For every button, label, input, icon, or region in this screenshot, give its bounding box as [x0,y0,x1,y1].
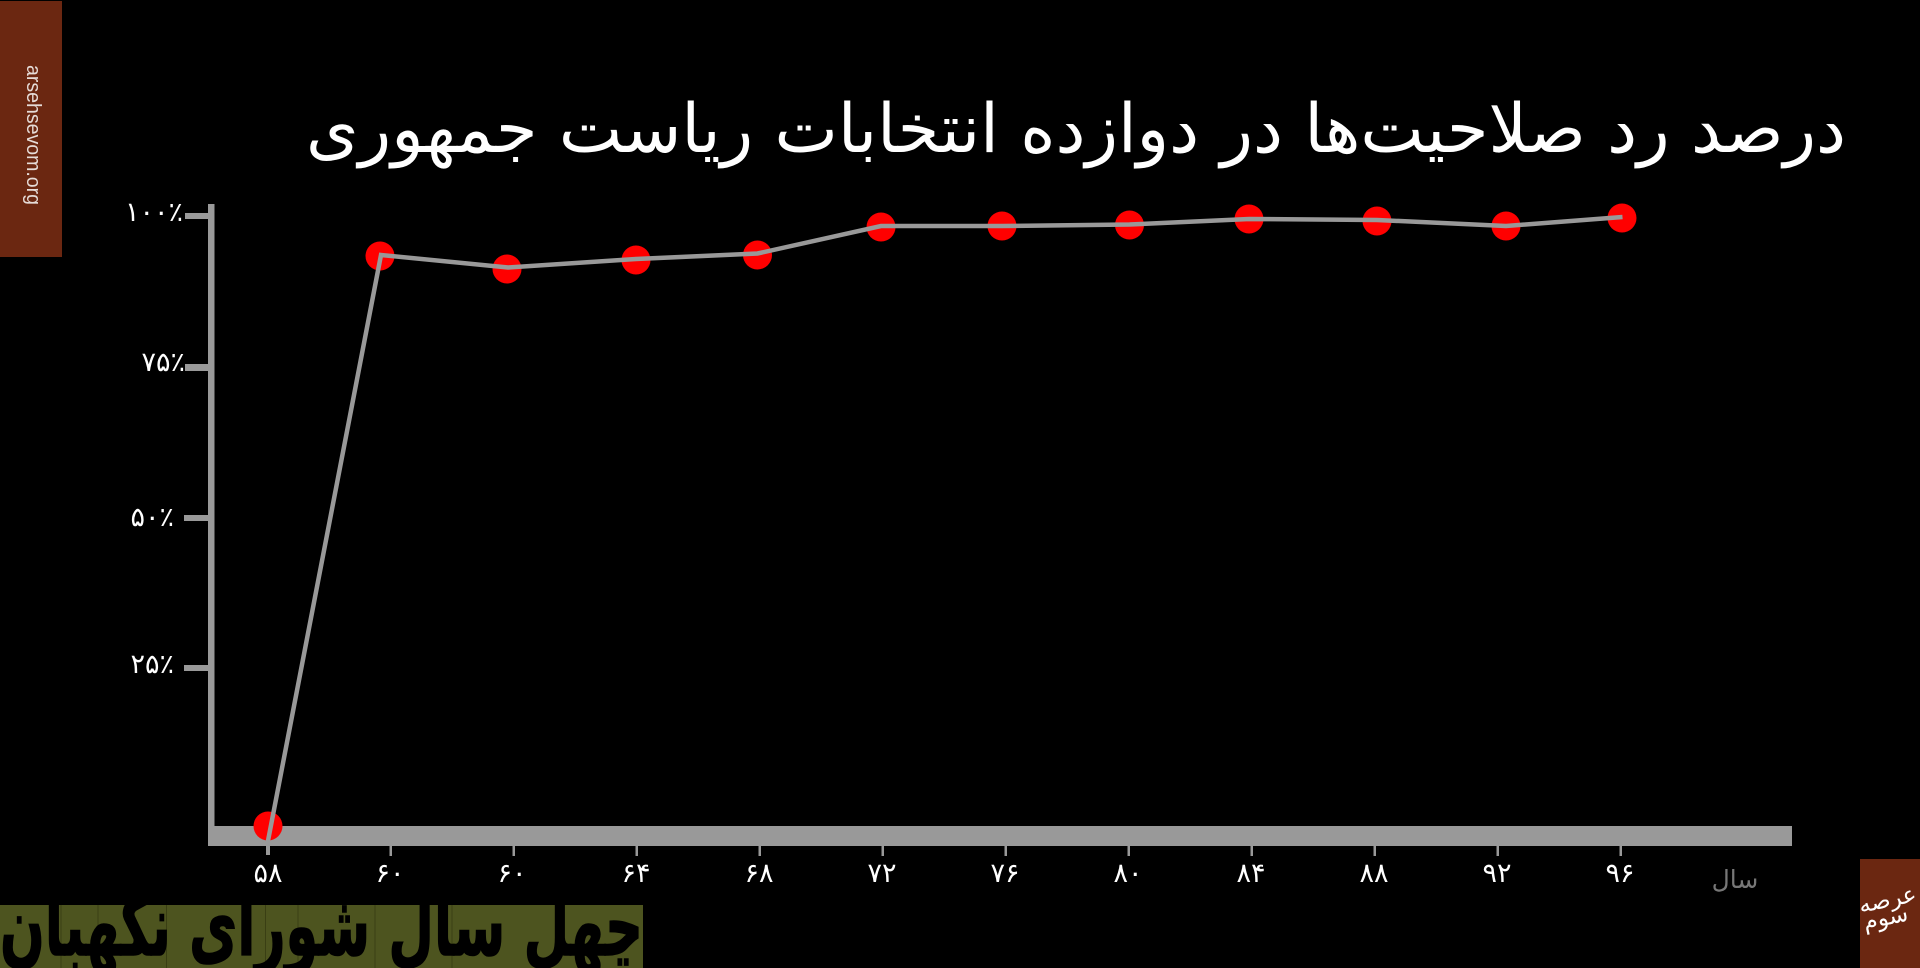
chart: x axis [209,826,1792,894]
y axis labels [125,197,185,680]
x axis labels: ۶۴ [621,858,651,889]
y axis labels: ۱۰۰٪ [125,197,183,228]
x axis labels [253,858,1635,889]
logo: corner tab: سوم [1861,901,1910,936]
x axis labels: ۸۰ [1113,858,1143,889]
x axis labels: ۷۲ [867,858,897,889]
x axis labels: ۶۸ [744,858,774,889]
y axis labels: ۷۵٪ [141,347,185,378]
banner: forty years of the guardian council [0,905,643,968]
x axis title: سال [1712,865,1758,894]
x axis labels: ۹۲ [1482,858,1512,889]
x axis labels: ۸۸ [1359,858,1389,889]
x axis labels: ۵۸ [253,858,283,889]
logo: corner tab [1856,859,1920,968]
y axis labels: ۲۵٪ [130,649,174,680]
chart: data points [254,204,1636,840]
panel: website side tab [0,1,62,257]
chart: data line [267,217,1622,846]
x axis labels: ۶۰ [375,858,405,889]
x axis labels: ۹۶ [1605,858,1635,889]
x axis labels: ۶۰ [497,858,527,889]
title: درصد رد صلاحیت‌ها در دوازده انتخابات ریاست جمهوری [306,90,1846,169]
chart: y axis [125,197,214,846]
y axis labels: ۵۰٪ [130,502,174,533]
x axis labels: ۸۴ [1236,858,1266,889]
logo: corner tab: عرصه [1856,881,1919,919]
panel: website side tab: arsehsevom.org [22,65,44,205]
x axis labels: ۷۶ [990,858,1020,889]
